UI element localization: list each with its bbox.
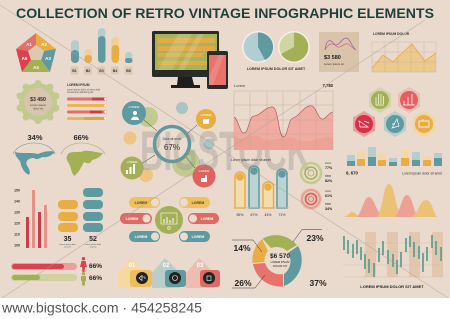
column chart with axis: 150 xyxy=(14,188,20,192)
pill column chart: Lorem ipsum dolor sit amet xyxy=(231,158,271,162)
bubble diagram: 67% xyxy=(164,143,180,152)
cylinder stack amber: Lorem ipsum dolor xyxy=(59,244,76,246)
pill buttons xyxy=(120,197,219,242)
house step 02 xyxy=(152,258,186,288)
pill column chart xyxy=(231,158,289,217)
mountain chart xyxy=(342,184,437,217)
pill buttons: LOREM xyxy=(135,235,147,239)
progress list: Lorem ipsum dolor sit amet dolor xyxy=(67,88,101,92)
pentagon chart xyxy=(16,33,56,72)
bubble diagram: LOREM xyxy=(199,169,210,173)
cylinder stack teal: 52 xyxy=(89,236,97,243)
donut chart: $6 570 xyxy=(270,253,290,260)
ring gauges: AAA xyxy=(325,161,331,165)
pentagon chart: A4 xyxy=(33,65,39,70)
column chart with axis: 120 xyxy=(14,222,20,226)
pill buttons: LOREM xyxy=(126,217,138,221)
area chart xyxy=(372,32,436,72)
progress list xyxy=(67,83,107,120)
gender bars xyxy=(11,257,102,286)
donut chart: 23% xyxy=(306,233,324,243)
column chart xyxy=(70,28,132,74)
pentagon chart: A5 xyxy=(22,56,28,61)
ring gauges: BBB xyxy=(325,174,331,178)
wave chart xyxy=(234,83,334,150)
price card: $3 580 xyxy=(324,55,341,61)
donut chart: 37% xyxy=(309,278,327,288)
center chart icon xyxy=(155,206,183,234)
ring gauges: 61% xyxy=(325,194,333,198)
stacked bars: Lorem ipsum dolor sit amet xyxy=(402,172,442,176)
column chart: B4 xyxy=(113,69,117,73)
footer url: www.bigstock.com · 454258245 xyxy=(1,300,202,316)
area chart: LOREM IPSUM DOLOR xyxy=(373,32,410,36)
hexagon icons xyxy=(353,87,435,137)
column chart with axis xyxy=(14,188,47,248)
pill column chart: 67% xyxy=(250,213,258,217)
house step 01 xyxy=(118,259,152,288)
donut chart: LOREM IPSUM xyxy=(271,260,290,264)
pentagon chart: A1 xyxy=(26,42,32,47)
cylinder stack amber xyxy=(58,200,78,248)
house step 03 xyxy=(186,258,220,288)
pentagon chart: A2 xyxy=(41,42,47,47)
title: COLLECTION OF RETRO VINTAGE INFOGRAPHIC ELEMENTS xyxy=(16,6,434,21)
ring gauges: 34% xyxy=(325,207,333,211)
cylinder stack teal xyxy=(83,188,103,248)
column chart: B1 xyxy=(72,69,77,73)
column chart: B3 xyxy=(99,69,104,73)
price card: Lorem ipsum sit xyxy=(324,62,344,66)
donut chart: 14% xyxy=(233,243,251,253)
cylinder stack amber: sit amet xyxy=(64,246,71,248)
candlestick chart: LOREM IPSUM DOLOR SIT AMET xyxy=(360,284,424,289)
pill column chart: 43% xyxy=(264,213,272,217)
bubble diagram: Data sit amet xyxy=(163,137,182,141)
bubble diagram: LOREM xyxy=(201,113,212,117)
price card xyxy=(319,32,359,72)
footer watermark band xyxy=(0,298,450,319)
column chart with axis: 140 xyxy=(14,200,20,204)
column chart with axis: 130 xyxy=(14,210,20,214)
ring gauges xyxy=(300,161,333,211)
stacked bars: 6, 670 xyxy=(346,170,359,176)
wave chart: 7,780 xyxy=(323,83,334,88)
stacked bars xyxy=(346,147,442,176)
gender bars: 66% xyxy=(89,263,102,270)
pill buttons: LOREM xyxy=(135,201,147,205)
world map right: 66% xyxy=(73,133,89,142)
pill buttons: LOREM xyxy=(192,235,204,239)
stat badge: $3 450 xyxy=(30,97,46,103)
world map left xyxy=(13,133,55,175)
cylinder stack amber: 35 xyxy=(64,236,71,243)
world map right xyxy=(61,133,105,176)
column chart with axis: 110 xyxy=(14,232,20,236)
progress list: consectetur adipiscing elit xyxy=(67,91,94,94)
world map left: 34% xyxy=(27,133,43,142)
stat badge xyxy=(16,80,60,124)
ring gauges: 82% xyxy=(325,179,333,183)
donut chart xyxy=(232,230,327,288)
monitor and phone xyxy=(152,31,228,89)
donut chart: DOLOR SIT xyxy=(273,264,288,268)
pill buttons: LOREM xyxy=(201,217,213,221)
house step 03: 03 xyxy=(197,263,204,269)
pie charts: LOREM IPSUM DOLOR SIT AMET xyxy=(247,67,306,71)
pentagon chart: A3 xyxy=(45,56,51,61)
bubble diagram: LOREM xyxy=(127,160,138,164)
ring gauges: 77% xyxy=(325,166,333,170)
column chart: B2 xyxy=(86,69,90,73)
pill column chart: 71% xyxy=(278,213,286,217)
bubble diagram: LOREM xyxy=(129,105,140,109)
watermark letters: BIGSTOCK xyxy=(140,119,310,182)
ring gauges: AAA xyxy=(325,189,331,193)
wave chart: Lorem xyxy=(234,83,246,88)
house step 02: 02 xyxy=(163,263,170,269)
stat badge: Lorem ipsum xyxy=(30,103,47,107)
gender bars: 66% xyxy=(89,275,102,282)
bubble diagram xyxy=(120,101,216,188)
stat badge: dolor sit xyxy=(33,106,43,110)
pie charts xyxy=(242,31,310,71)
house step 01: 01 xyxy=(129,263,136,269)
progress list: LOREM IPSUM xyxy=(67,83,90,87)
candlestick chart xyxy=(343,232,443,289)
cylinder stack teal: Lorem ipsum dolor xyxy=(85,244,102,246)
ring gauges: BBB xyxy=(325,202,331,206)
donut chart: 26% xyxy=(234,278,252,288)
pill column chart: 55% xyxy=(236,213,244,217)
column chart: B5 xyxy=(126,69,131,73)
pill buttons: LOREM xyxy=(192,201,204,205)
cylinder stack teal: sit amet xyxy=(89,246,97,248)
column chart with axis: 100 xyxy=(14,244,20,248)
